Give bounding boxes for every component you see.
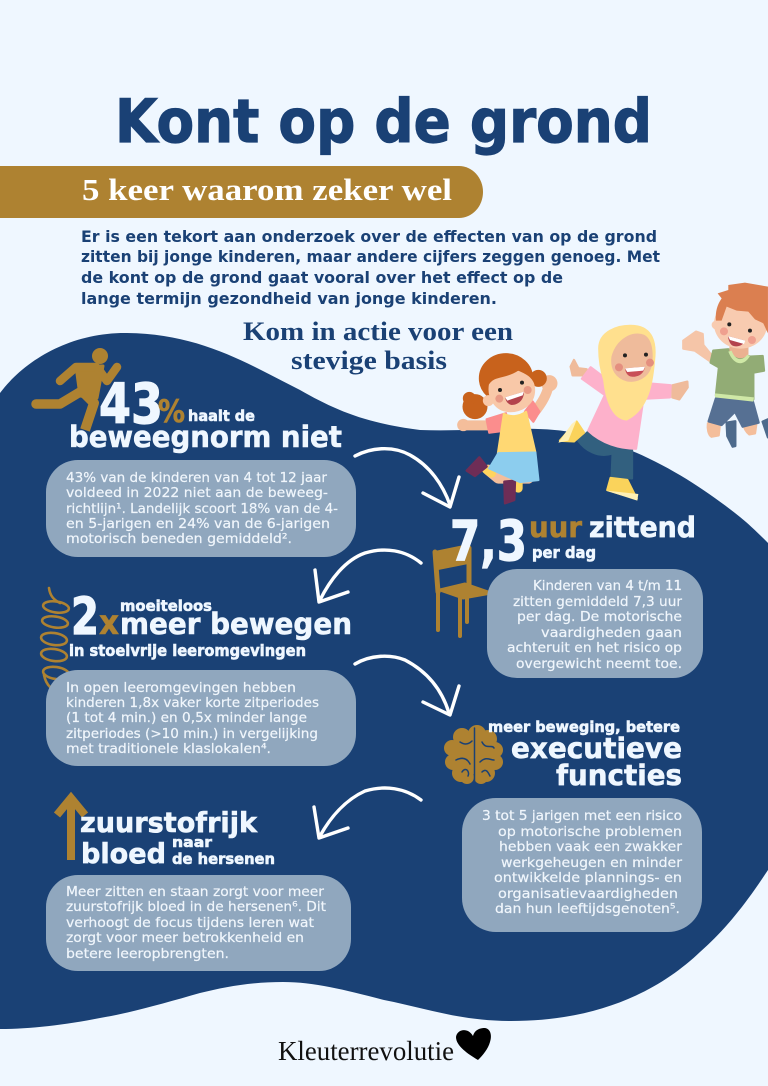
text panel 5: verhoogt de focus tijdens leren wat <box>66 915 314 931</box>
heading: 43% haalt de beweegnorm niet: beweegnorm niet <box>69 420 342 454</box>
text panel 4: dan hun leeftijdsgenoten⁵. <box>495 901 680 917</box>
text panel 5: betere leeropbrengten. <box>66 946 229 962</box>
stat 1: 43% beweegnorm <box>36 348 356 557</box>
text panel 4: ontwikkelde plannings- en <box>494 870 682 886</box>
text panel 4: op motorische problemen <box>498 824 682 840</box>
text panel 1 <box>46 460 356 557</box>
intro paragraph: lange termijn gezondheid van jonge kinderen. <box>81 289 497 308</box>
heading: 7,3 uur zittend per dag: zittend <box>589 511 696 544</box>
stat 5: zuurstofrijk bloed <box>46 798 351 971</box>
heading: 43% haalt de beweegnorm niet: haalt de <box>188 407 255 425</box>
icon: up arrow <box>57 798 85 860</box>
text panel 2: per dag. De motorische <box>517 609 682 625</box>
icon: brain <box>444 725 503 784</box>
navy background blob <box>0 333 768 1029</box>
text panel 1: motorisch beneden gemiddeld². <box>66 531 292 547</box>
call to action heading: Kom in actie voor een <box>243 317 514 346</box>
heading: zuurstofrijk bloed naar de hersenen: de hersenen <box>172 850 275 868</box>
text panel 4: 3 tot 5 jarigen met een risico <box>482 808 682 824</box>
heading: 2x moeiteloos meer bewegen: 2 <box>71 588 99 647</box>
heading: 2x moeiteloos meer bewegen <box>69 588 352 660</box>
heading: zuurstofrijk bloed naar de hersenen: naar <box>172 835 213 851</box>
text panel 5 <box>46 875 351 971</box>
stat 2: 7,3 uur zittend <box>435 509 703 678</box>
heading: meer beweging, betere executieve functies: functies <box>556 759 682 792</box>
arrow: stat 3 to stat 4 <box>355 656 459 715</box>
heading: 2x moeiteloos meer bewegen: meer bewegen <box>120 607 352 641</box>
girl with red hair <box>458 354 556 503</box>
logo: Kleuterrevolutie with heart: Kleuterrevolutie <box>278 1036 454 1066</box>
stat 3: 2x meer bewegen <box>40 588 356 766</box>
heading: zuurstofrijk bloed naar de hersenen: bloed <box>81 837 166 870</box>
text panel 3: In open leeromgevingen hebben <box>66 680 296 696</box>
heading: meer beweging, betere executieve functies <box>488 718 682 792</box>
call to action heading: stevige basis <box>291 346 447 375</box>
arrow: stat 4 to stat 5 <box>314 788 421 838</box>
text panel 4: hebben vaak een zwakker <box>499 839 682 855</box>
icon: spring <box>40 588 70 687</box>
heading: 7,3 uur zittend per dag <box>450 509 696 573</box>
text panel 4 <box>462 798 702 932</box>
heading: meer beweging, betere executieve functies: executieve <box>511 732 682 765</box>
icon: running person <box>36 348 117 430</box>
heading: 43% haalt de beweegnorm niet: % <box>158 394 185 430</box>
text panel 3: met traditionele klaslokalen⁴. <box>66 741 271 757</box>
icon: chair <box>435 545 491 636</box>
text panel 2: Kinderen van 4 t/m 11 <box>533 578 682 594</box>
text panel 2: overgewicht neemt toe. <box>516 656 682 672</box>
stat 4: executieve functies <box>444 718 702 932</box>
intro paragraph: zitten bij jonge kinderen, maar andere cijfers zeggen genoeg. Met <box>81 247 660 266</box>
heading: 2x moeiteloos meer bewegen: in stoelvrije leeromgevingen <box>69 641 306 660</box>
title: Kont op de grond <box>115 87 652 157</box>
text panel 4: werkgeheugen en minder <box>501 855 682 871</box>
text panel 3 <box>46 670 356 766</box>
text panel 3: zitperiodes (>10 min.) in vergelijking <box>66 726 318 742</box>
heading: meer beweging, betere executieve functies: meer beweging, betere <box>488 718 680 736</box>
text panel 2 <box>487 569 703 678</box>
heading: 43% haalt de beweegnorm niet: 43 <box>99 372 163 436</box>
call to action heading <box>243 317 514 375</box>
heading: 7,3 uur zittend per dag: per dag <box>532 543 596 562</box>
intro paragraph: de kont op de grond gaat vooral over het effect op de <box>81 268 563 287</box>
subtitle banner: 5 keer waarom zeker wel <box>82 172 452 207</box>
text panel 1: en 5-jarigen en 24% van de 6-jarigen <box>66 516 330 532</box>
heading: 7,3 uur zittend per dag: 7,3 <box>450 509 527 573</box>
text panel 5: Meer zitten en staan zorgt voor meer <box>66 884 324 900</box>
text panel 3: (1 tot 4 min.) en 0,5x minder lange <box>66 710 307 726</box>
heading: 2x moeiteloos meer bewegen: moeiteloos <box>120 597 212 615</box>
text panel 2: zitten gemiddeld 7,3 uur <box>513 594 682 610</box>
subtitle banner <box>0 166 483 218</box>
text panel 1: richtlijn¹. Landelijk scoort 18% van de 4- <box>66 501 338 517</box>
text panel 5: zuurstofrijk bloed in de hersenen⁶. Dit <box>66 899 326 915</box>
text panel 5: zorgt voor meer betrokkenheid en <box>66 930 304 946</box>
text panel 3: kinderen 1,8x vaker korte zitperiodes <box>66 695 319 711</box>
arrow: stat 1 to stat 2 <box>355 449 459 507</box>
heading: 7,3 uur zittend per dag: uur <box>529 511 582 544</box>
heading: zuurstofrijk bloed naar de hersenen: zuurstofrijk <box>80 806 258 839</box>
intro paragraph: Er is een tekort aan onderzoek over de effecten van op de grond <box>81 227 657 246</box>
text panel 4: organisatievaardigheden <box>498 886 678 902</box>
illustration: three jumping children <box>458 283 768 503</box>
text panel 1: 43% van de kinderen van 4 tot 12 jaar <box>66 470 327 486</box>
text panel 2: achteruit en het risico op <box>507 640 682 656</box>
text panel 2: vaardigheden gaan <box>541 625 682 641</box>
logo: Kleuterrevolutie with heart <box>278 1028 491 1066</box>
heading: zuurstofrijk bloed naar de hersenen <box>80 806 275 870</box>
girl with yellow headscarf <box>558 326 688 501</box>
boy with orange hair <box>683 283 768 447</box>
heading: 2x moeiteloos meer bewegen: x <box>99 603 119 643</box>
arrow: stat 2 to stat 3 <box>315 550 421 602</box>
heading: 43% haalt de beweegnorm niet <box>69 372 342 454</box>
text panel 1: voldeed in 2022 niet aan de beweeg- <box>66 485 328 501</box>
intro paragraph <box>81 227 660 308</box>
